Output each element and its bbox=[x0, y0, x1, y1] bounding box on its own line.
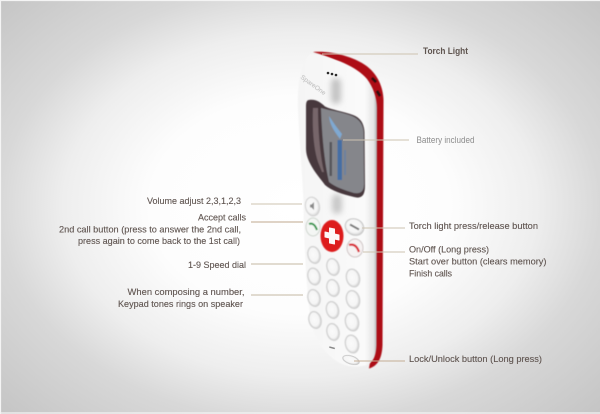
label: accept and 2nd call: Accept calls bbox=[198, 212, 246, 222]
blue label bbox=[338, 140, 342, 180]
leader lines bbox=[251, 54, 418, 361]
end call button bbox=[347, 239, 363, 257]
microphone slot bbox=[329, 346, 335, 349]
label: battery: Battery included bbox=[416, 135, 474, 145]
label: keypad tones bbox=[118, 287, 244, 309]
torch button bbox=[343, 216, 366, 238]
label: on/off: Finish calls bbox=[409, 268, 452, 278]
speaker dots bbox=[327, 72, 337, 76]
red cross button bbox=[320, 220, 344, 252]
label: accept and 2nd call: 2nd call button (press to answer the 2nd call, bbox=[59, 224, 241, 234]
brand name: SpareOne bbox=[299, 74, 327, 97]
label: volume: Volume adjust 2,3,1,2,3 bbox=[147, 196, 241, 206]
central shadow groove top bbox=[331, 78, 341, 104]
battery window bbox=[306, 100, 365, 198]
dark print bbox=[330, 142, 332, 176]
volume button bbox=[304, 196, 321, 217]
keypad bbox=[306, 245, 362, 354]
label: torch light: Torch Light bbox=[423, 46, 468, 56]
left labels bbox=[59, 196, 246, 309]
label: speed dial: 1-9 Speed dial bbox=[188, 260, 246, 270]
red side strip bbox=[313, 52, 384, 368]
battery panel bbox=[321, 108, 364, 193]
right labels bbox=[409, 46, 546, 364]
phone body bbox=[298, 54, 377, 367]
phone bbox=[298, 52, 384, 368]
label: accept and 2nd call bbox=[59, 212, 246, 246]
blue swoosh bbox=[329, 116, 342, 139]
label: accept and 2nd call: press again to come back to the 1st call) bbox=[78, 236, 240, 246]
label: keypad tones: When composing a number, bbox=[128, 287, 244, 297]
label: torch button: Torch light press/release button bbox=[409, 221, 538, 231]
central shadow groove bottom bbox=[332, 194, 342, 214]
inner left reflection bbox=[313, 108, 324, 172]
label: keypad tones: Keypad tones rings on speaker bbox=[118, 299, 243, 309]
lock button bbox=[342, 354, 360, 366]
label: lock: Lock/Unlock button (Long press) bbox=[409, 354, 542, 364]
label: on/off bbox=[409, 244, 546, 278]
accept call button bbox=[306, 218, 320, 236]
label: on/off: On/Off (Long press) bbox=[409, 244, 489, 254]
label: on/off: Start over button (clears memory) bbox=[409, 256, 546, 266]
torch dark marks bbox=[372, 78, 380, 96]
